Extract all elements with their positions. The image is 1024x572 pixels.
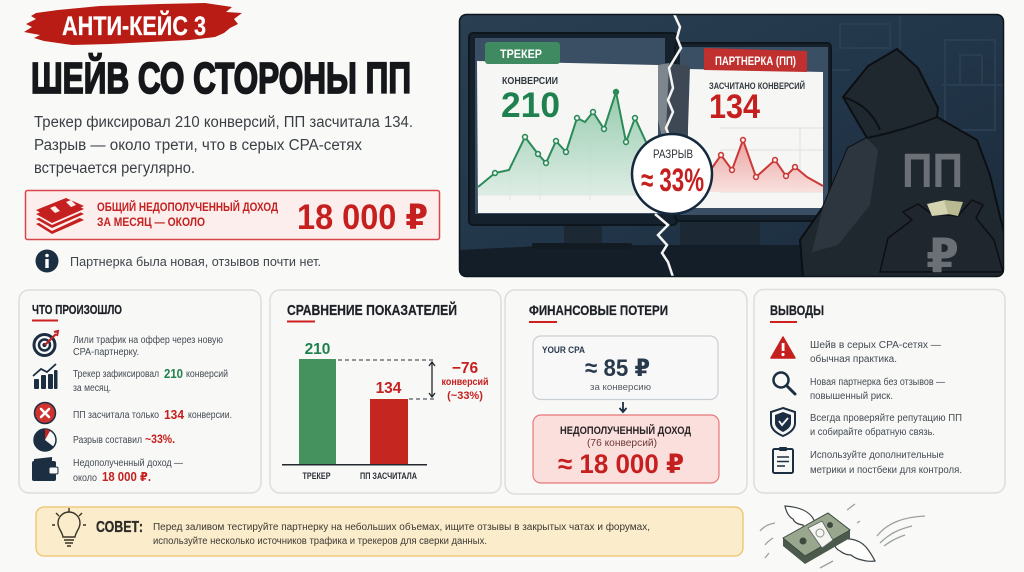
- illustration: flying money: [760, 504, 925, 568]
- figure: hooded man: [800, 49, 1004, 282]
- bar chart: ТРЕКЕР: [302, 471, 330, 481]
- box: CPA: [533, 336, 718, 400]
- bar chart: 210: [305, 341, 330, 358]
- item: additional metrics: Используйте дополнительные: [810, 450, 944, 461]
- tip banner: Перед заливом тестируйте партнерку на небольших объемах, ищите отзывы в закрытых чатах и форумах,: [153, 521, 650, 533]
- item: common practice: обычная практика.: [810, 353, 897, 365]
- badge: anti-case 3: [24, 3, 242, 45]
- hero illustration: [459, 14, 1004, 282]
- icon: money stack: [36, 198, 84, 234]
- tip banner: используйте несколько источников трафика и трекеров для сверки данных.: [153, 535, 487, 547]
- label: tracker: [485, 42, 560, 64]
- icon: wallet: [32, 457, 58, 481]
- label: partner network: [704, 48, 807, 72]
- item: additional metrics: метрики и постбеки для контроля.: [810, 464, 962, 476]
- item: check reputation: и собирайте обратную связь.: [810, 426, 935, 438]
- badge: anti-case 3: АНТИ-КЕЙС 3: [62, 10, 206, 41]
- chart: tracker conversions: [478, 90, 655, 195]
- left monitor: 210: [501, 86, 560, 125]
- box: lost income: (76 конверсий): [587, 438, 657, 449]
- icon: target: [34, 331, 58, 356]
- item: tracker count: 210: [164, 367, 183, 381]
- title: ШЕЙВ СО СТОРОНЫ ПП: [31, 52, 411, 103]
- note: new partner: Партнерка была новая, отзывов почти нет.: [70, 255, 321, 269]
- panel: comparison: [270, 290, 501, 493]
- left monitor: [469, 33, 677, 249]
- item: gap: ~33%.: [145, 432, 175, 446]
- tear line: [655, 14, 681, 277]
- item: traffic: Лили трафик на оффер через новую: [73, 334, 223, 346]
- item: additional metrics: [810, 450, 962, 476]
- chart: credited conversions: [700, 138, 823, 192]
- item: tracker count: за месяц.: [73, 383, 111, 394]
- label: tracker: ТРЕКЕР: [500, 47, 542, 61]
- item: credited count: 134: [164, 408, 184, 422]
- callout: minus 76: [442, 360, 488, 402]
- intro text: [34, 114, 413, 177]
- box: lost income: [533, 415, 719, 483]
- callout: total lost income: ОБЩИЙ НЕДОПОЛУЧЕННЫЙ ДОХОД: [97, 199, 278, 214]
- icon: money bag: ₽: [926, 229, 959, 282]
- item: higher risk: Новая партнерка без отзывов —: [810, 376, 945, 388]
- panel: what happened: [19, 290, 261, 493]
- tip banner: [36, 507, 743, 556]
- bar chart: ПП ЗАСЧИТАЛА: [360, 471, 417, 481]
- item: gap: Разрыв составил: [73, 435, 142, 446]
- callout: minus 76: −76: [452, 360, 479, 377]
- panel: conclusions: [754, 290, 1005, 493]
- right monitor: 134: [709, 88, 760, 126]
- item: traffic: CPA-партнерку.: [73, 347, 139, 358]
- item: tracker count: [73, 367, 228, 394]
- smoke strip along the tear: [658, 63, 690, 135]
- icon: rejected: [34, 402, 56, 424]
- badge: gap 33%: РАЗРЫВ: [653, 149, 693, 161]
- callout: total lost income: ЗА МЕСЯЦ — ОКОЛО: [97, 215, 205, 229]
- item: common practice: [810, 340, 941, 365]
- box: CPA: YOUR CPA: [542, 345, 585, 355]
- intro text: встречается регулярно.: [34, 160, 195, 177]
- icon: magnifier: [774, 372, 795, 394]
- heading: ВЫВОДЫ: [770, 302, 824, 318]
- icon: money bag: [880, 200, 1003, 282]
- icon: clipboard: [773, 447, 793, 473]
- item: check reputation: Всегда проверяйте репутацию ПП: [810, 413, 962, 424]
- icon: shield: [771, 408, 795, 436]
- item: gap: [73, 432, 175, 446]
- bar chart: [282, 341, 434, 481]
- item: credited count: ПП засчитала только: [73, 410, 159, 421]
- heading: ЧТО ПРОИЗОШЛО: [32, 302, 122, 317]
- item: tracker count: конверсий: [186, 369, 228, 380]
- box: CPA: ≈ 85 ₽: [585, 355, 650, 382]
- heading: СРАВНЕНИЕ ПОКАЗАТЕЛЕЙ: [287, 301, 457, 319]
- item: credited count: конверсии.: [188, 410, 232, 421]
- badge: gap 33%: ≈ 33%: [641, 162, 704, 198]
- right monitor: ЗАСЧИТАНО КОНВЕРСИЙ: [709, 80, 805, 92]
- callout: total lost income: [26, 190, 440, 240]
- left monitor: КОНВЕРСИИ: [502, 76, 558, 87]
- tip banner: СОВЕТ:: [96, 519, 143, 536]
- bar chart: 134: [376, 380, 402, 397]
- text: jacket letters: ПП: [902, 145, 963, 198]
- item: credited count: [73, 408, 232, 422]
- note: new partner: [36, 250, 321, 272]
- callout: minus 76: конверсий: [442, 377, 488, 388]
- intro text: Разрыв — около трети, что в серых CPA-сетях: [34, 137, 362, 154]
- item: higher risk: повышенный риск.: [810, 391, 893, 402]
- item: tracker count: Трекер зафиксировал: [73, 368, 159, 380]
- icon: growth chart: [33, 364, 58, 389]
- icon: warning: [771, 337, 795, 358]
- arrow: gap: [429, 362, 435, 397]
- label: partner network: ПАРТНЕРКА (ПП): [715, 54, 796, 68]
- box: CPA: за конверсию: [590, 382, 651, 392]
- item: check reputation: [810, 413, 962, 438]
- heading: ФИНАНСОВЫЕ ПОТЕРИ: [529, 302, 668, 318]
- item: common practice: Шейв в серых CPA-сетях —: [810, 340, 941, 351]
- box: lost income: ≈ 18 000 ₽: [558, 449, 684, 479]
- callout: minus 76: (~33%): [447, 390, 483, 402]
- arrow: down: [620, 402, 626, 412]
- panel: financial losses: [505, 290, 747, 494]
- icon: pie clock: [34, 429, 56, 451]
- right monitor: [675, 43, 831, 245]
- item: higher risk: [810, 376, 945, 402]
- icon: light bulb: [52, 508, 86, 546]
- item: traffic: [73, 334, 223, 358]
- badge: gap 33%: [632, 134, 712, 214]
- callout: total lost income: 18 000 ₽: [297, 198, 428, 237]
- item: lost income: 18 000 ₽.: [102, 470, 151, 484]
- item: lost income: [73, 458, 183, 484]
- box: lost income: НЕДОПОЛУЧЕННЫЙ ДОХОД: [560, 424, 691, 437]
- item: lost income: Недополученный доход —: [73, 458, 183, 469]
- item: lost income: около: [73, 473, 97, 484]
- intro text: Трекер фиксировал 210 конверсий, ПП засчитала 134.: [34, 114, 413, 131]
